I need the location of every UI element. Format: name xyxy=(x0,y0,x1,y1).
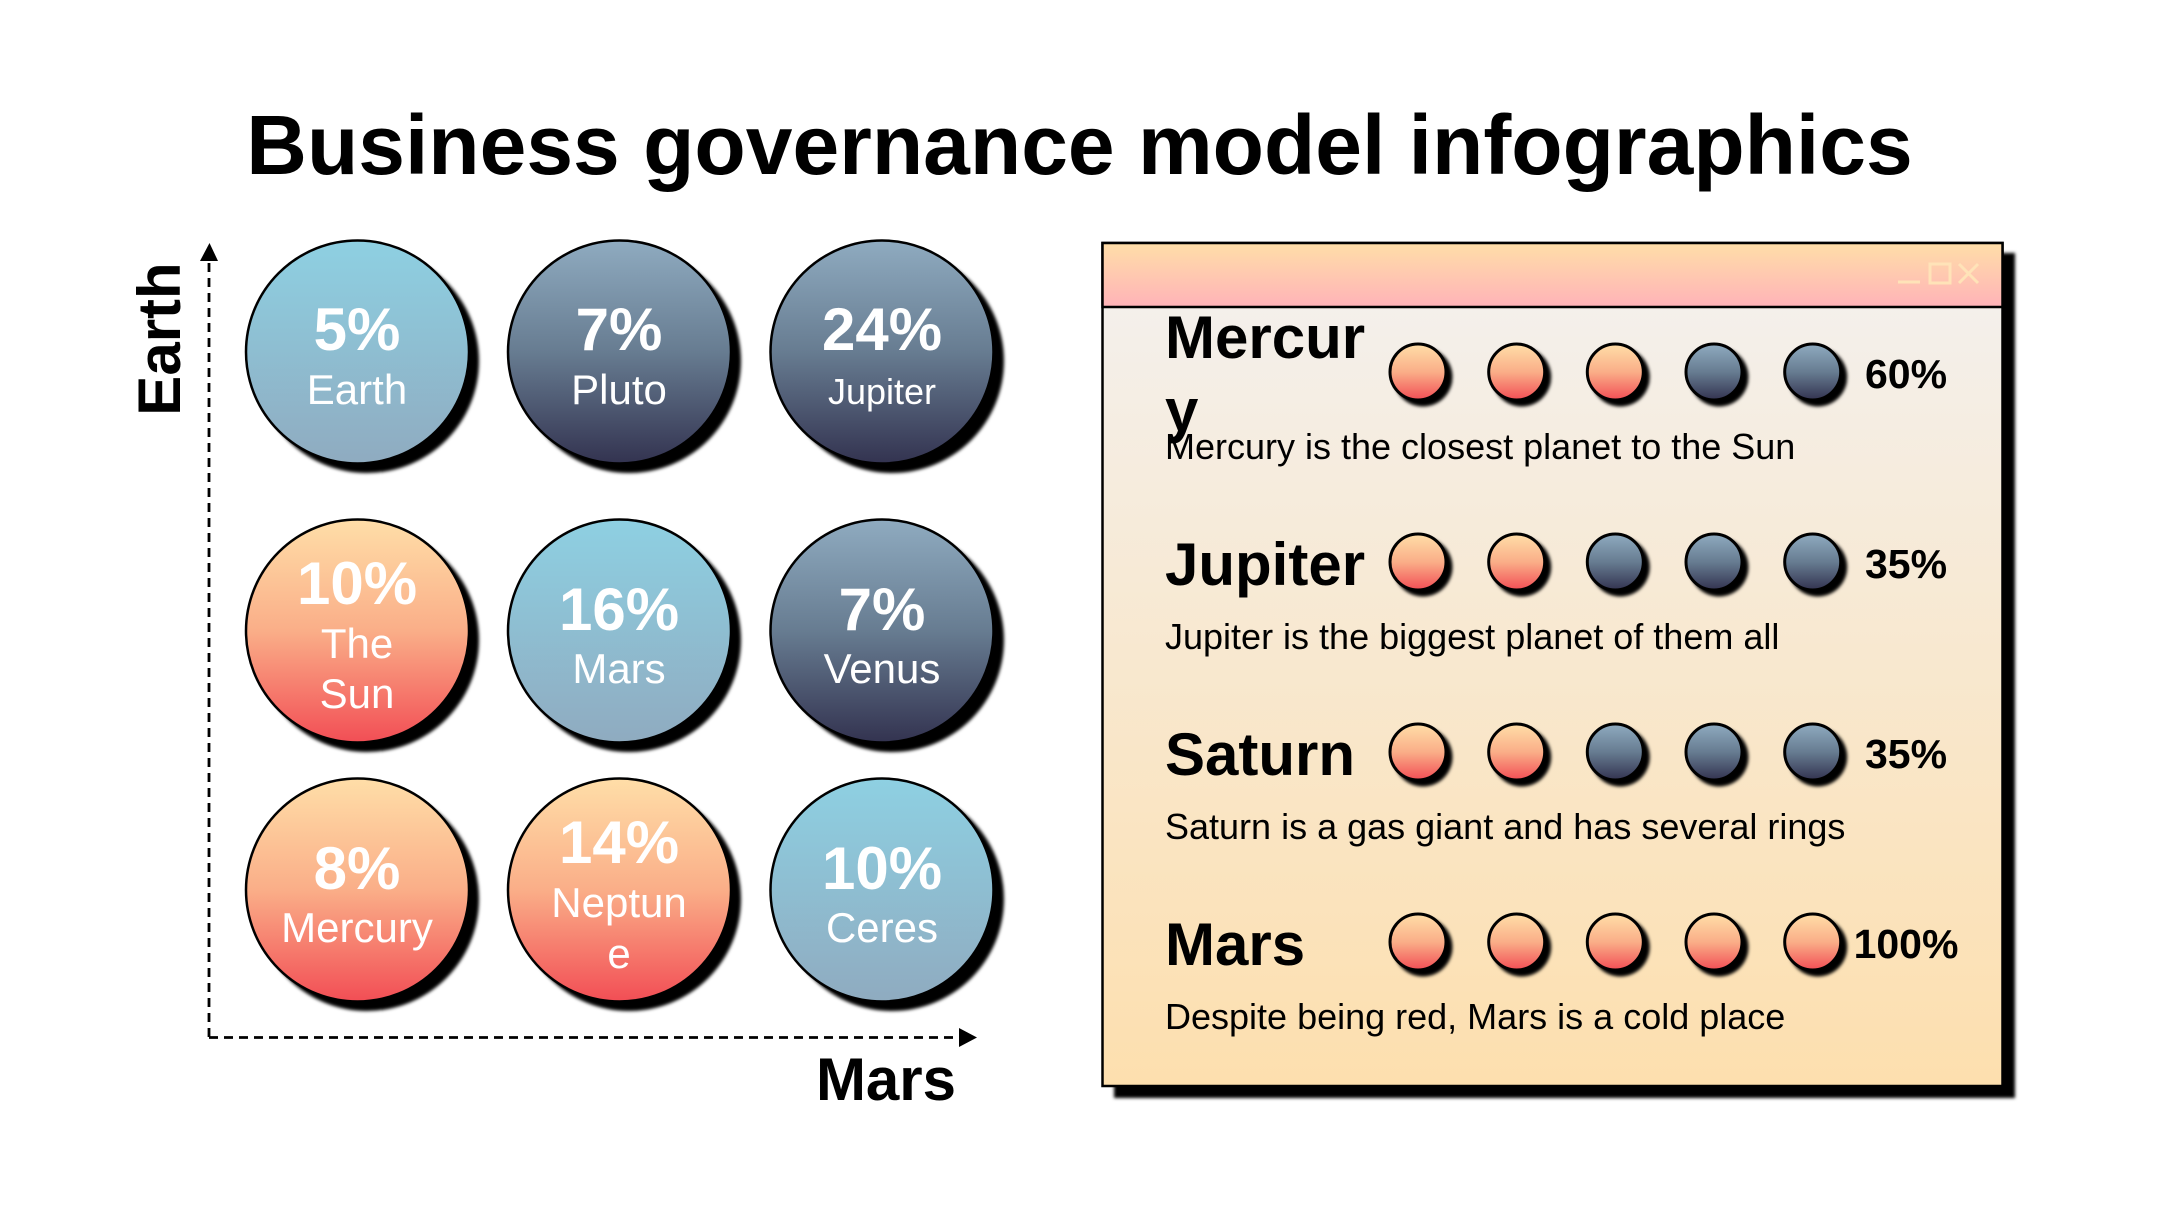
row: Mercury: Mercur xyxy=(1165,304,1365,371)
axis label: Earth: Earth xyxy=(126,262,193,416)
title: Business governance model infographics xyxy=(246,98,1913,192)
bubble: Mars: 16% xyxy=(559,576,679,643)
row: Saturn: Saturn xyxy=(1165,721,1355,788)
window controls xyxy=(1898,264,1978,283)
bubble: Venus: Venus xyxy=(824,645,940,692)
bubble: Venus: 7% xyxy=(839,576,925,643)
bubble: Jupiter: Jupiter xyxy=(828,371,936,412)
row: Mercury: 60% xyxy=(1865,351,1947,397)
axes xyxy=(200,243,977,1047)
bubble: Ceres xyxy=(770,778,1004,1011)
row: Mars: Mars xyxy=(1165,911,1305,978)
bubble: The Sun: Sun xyxy=(320,670,394,717)
window body xyxy=(1102,243,2002,1086)
row: Mercury xyxy=(1165,304,1947,467)
bubble: Jupiter xyxy=(770,240,1004,473)
row: Mercury: y xyxy=(1165,377,1199,444)
bubble: Mars: Mars xyxy=(572,645,666,692)
row: Saturn: 35% xyxy=(1865,731,1947,777)
row: Jupiter: Jupiter is the biggest planet of them all xyxy=(1165,616,1779,657)
bubble: The Sun xyxy=(246,520,479,752)
bubble: Earth xyxy=(246,240,479,473)
bubble: Pluto xyxy=(508,240,741,473)
bubble: Pluto: Pluto xyxy=(571,366,667,413)
row: Jupiter: 35% xyxy=(1865,541,1947,587)
row: Saturn: Saturn is a gas giant and has several rings xyxy=(1165,806,1845,847)
row: Jupiter: Jupiter xyxy=(1165,531,1365,598)
bubble: Mercury: 8% xyxy=(314,835,400,902)
row: Jupiter xyxy=(1165,531,1947,657)
panel: window xyxy=(1102,243,2015,1098)
bubble: Neptune: e xyxy=(607,930,631,977)
window shadow xyxy=(1114,253,2015,1098)
bubble: Pluto: 7% xyxy=(576,296,662,363)
row: Saturn xyxy=(1165,721,1947,847)
chart: planet matrix xyxy=(126,240,1004,1113)
bubble: Ceres: 10% xyxy=(822,835,942,902)
axis label: Mars: Mars xyxy=(816,1046,956,1113)
bubble: Mars xyxy=(508,520,741,752)
bubble: Venus xyxy=(770,520,1004,752)
row: Mars: 100% xyxy=(1854,921,1958,967)
bubble: Jupiter: 24% xyxy=(822,296,942,363)
row: Mars: Despite being red, Mars is a cold place xyxy=(1165,996,1785,1037)
row: Mercury: Mercury is the closest planet to the Sun xyxy=(1165,426,1795,467)
bubble: Neptune xyxy=(508,778,741,1011)
bubble: Neptune: 14% xyxy=(559,809,679,876)
bubble: Neptune: Neptun xyxy=(551,879,687,926)
bubble: The Sun: The xyxy=(321,620,393,667)
bubble: Mercury: Mercury xyxy=(281,904,433,951)
bubble: Earth: 5% xyxy=(314,296,400,363)
bubble: The Sun: 10% xyxy=(297,550,417,617)
bubble: Mercury xyxy=(246,778,479,1011)
row: Mars xyxy=(1165,911,1958,1037)
window title bar xyxy=(1102,243,2002,307)
bubble: Ceres: Ceres xyxy=(826,904,938,951)
bubble: Earth: Earth xyxy=(307,366,407,413)
